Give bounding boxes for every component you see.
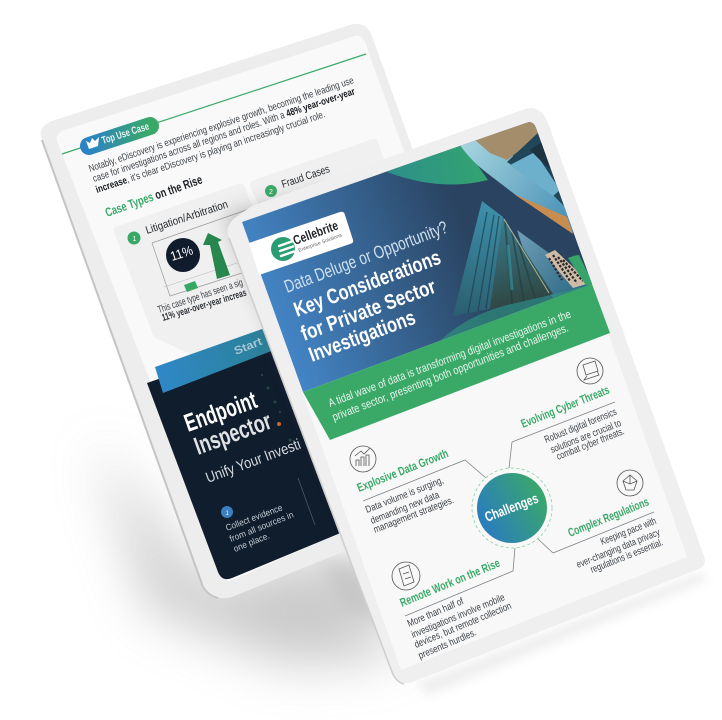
item: remote work on the rise [392, 556, 513, 662]
top use case header [62, 54, 366, 154]
panel: fraud card [250, 139, 400, 250]
back tablet body [41, 24, 535, 598]
number badge 2 [265, 185, 277, 197]
title block: Key Considerations [291, 246, 444, 322]
lower teal arc [441, 286, 587, 340]
green band: A tidal wave of data is transforming digital investigations in the [327, 309, 573, 410]
icon: network [617, 470, 643, 496]
panel: litigation card: This case type has seen a sig [156, 277, 244, 316]
small building [545, 250, 590, 288]
green corner [568, 255, 592, 286]
glass building [460, 140, 573, 233]
item: evolving cyber threats: Robust digital forensics [543, 407, 619, 446]
case types heading: Case Types on the Rise [103, 173, 204, 220]
product name: Endpoint [181, 386, 261, 438]
green band: private sector, presenting both opportunities and challenges. [331, 322, 570, 424]
title block: Data Deluge or Opportunity? [281, 217, 450, 297]
step 1: 1 [226, 511, 230, 517]
background shadows [95, 440, 708, 695]
item: complex regulations: ever-changing data privacy [575, 527, 662, 571]
header panel [242, 120, 600, 392]
logo box [249, 212, 353, 275]
top use case header: Top Use Case [100, 120, 151, 147]
panel: endpoint inspector dark [147, 329, 340, 580]
green band [303, 284, 610, 440]
panel: endpoint inspector dark: Inspector [190, 407, 275, 461]
step 1 [221, 502, 295, 554]
chart: growth arrows [152, 208, 252, 296]
item: evolving cyber threats: combat cyber threats. [555, 426, 626, 463]
step 1: from all sources in [228, 510, 295, 544]
connector lines [363, 402, 654, 616]
panel: endpoint inspector dark: Start [233, 336, 264, 358]
item: explosive data growth: management strategies. [372, 495, 455, 536]
logo box: Enterprise Solutions [298, 232, 343, 254]
back tablet screen [57, 36, 500, 582]
item: complex regulations: Complex Regulations [566, 495, 651, 540]
panel: endpoint inspector dark: Unify Your Investi [203, 436, 303, 487]
item: explosive data growth: demanding new data [369, 490, 441, 527]
front tablet body [228, 108, 705, 683]
item: explosive data growth: Data volume is surging, [364, 475, 445, 516]
item: evolving cyber threats: Evolving Cyber Threats [519, 383, 612, 431]
item: complex regulations: regulations is essential. [589, 537, 665, 576]
panel: litigation card: 1 [132, 236, 136, 243]
challenges hub [472, 468, 552, 548]
icon: mobile [392, 562, 420, 590]
item: evolving cyber threats: solutions are crucial to [549, 418, 623, 456]
title block [281, 217, 450, 367]
tower left face [453, 201, 503, 316]
icon: cellebrite mark [271, 237, 295, 261]
item: remote work on the rise: presents hurdles. [417, 627, 478, 662]
start band [155, 329, 300, 393]
orange dot [277, 422, 281, 426]
item: complex regulations [566, 470, 665, 576]
panel: litigation card: Litigation/Arbitration [144, 199, 230, 237]
number badge 1 [128, 232, 140, 244]
upper building [475, 120, 540, 160]
challenges hub: Challenges [482, 490, 540, 525]
tower right face [490, 217, 553, 309]
green arc [387, 144, 488, 184]
item: complex regulations: Keeping pace with [599, 516, 658, 548]
intro paragraph: Notably, eDiscovery is experiencing explosive growth, becoming the leading use [87, 75, 356, 175]
panel: litigation card [114, 184, 330, 420]
item: explosive data growth [350, 446, 455, 536]
item: remote work on the rise: devices, but remote collection [413, 601, 513, 651]
intro paragraph: increase, it's clear eDiscovery is playing an increasingly crucial role. [94, 109, 327, 196]
title block: Investigations [306, 306, 419, 367]
panel: fraud card: Fraud Cases [280, 163, 332, 191]
item: explosive data growth: Explosive Data Growth [355, 446, 450, 495]
icon: monitor [577, 358, 603, 384]
item: remote work on the rise: investigations involve mobile [410, 592, 507, 641]
item: remote work on the rise: More than half of [406, 596, 466, 630]
step 1: one place. [232, 530, 271, 554]
shadow of front tablet on back tablet [220, 184, 314, 329]
panel: fraud card: 2 [269, 189, 273, 196]
panel: litigation card: 11% year-over-year increas [161, 288, 248, 324]
front tablet screen [242, 122, 687, 670]
chart: growth arrows: 11% [168, 242, 195, 264]
item: evolving cyber threats [519, 358, 626, 463]
step 1: Collect evidence [224, 502, 284, 533]
intro paragraph: case for investigations across all regions and roles. With a 48% year-over-year [91, 86, 357, 185]
title block: for Private Sector [298, 275, 439, 346]
item: remote work on the rise: Remote Work on the Rise [398, 556, 502, 610]
icon: bar chart [350, 446, 376, 472]
back tablet [41, 24, 412, 599]
stat: 11% [166, 238, 200, 272]
logo box: Cellebrite [291, 218, 340, 248]
icon: crown [86, 137, 99, 149]
front tablet [228, 108, 705, 684]
orange facade [514, 194, 573, 234]
tower back [517, 230, 592, 300]
